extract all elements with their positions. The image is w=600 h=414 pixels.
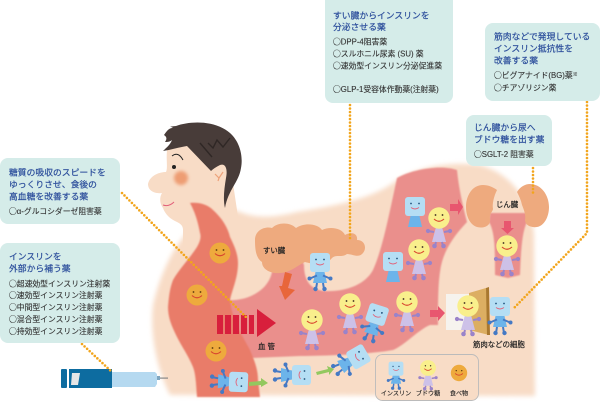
heading: absorption: 高血糖を改善する薬	[9, 190, 88, 202]
food 1	[210, 242, 230, 264]
heading: kidney drugs: ブドウ糖を出す薬	[474, 134, 545, 144]
legend glucose icon	[418, 360, 438, 390]
glucose 5	[394, 291, 420, 332]
food 3	[206, 340, 226, 362]
panel: absorption drugs	[0, 158, 120, 224]
insulin tilted	[356, 302, 392, 346]
drug list: pancreas drugs: ○速効型インスリン分泌促進薬	[333, 61, 442, 72]
drug list: absorption: ○α‑グルコシダーゼ阻害薬	[9, 206, 102, 217]
head and neck	[148, 135, 240, 250]
insulin near pancreas	[308, 253, 332, 291]
heading: resistance drugs: 改善する薬	[494, 54, 538, 66]
panel: pancreas drugs	[325, 0, 453, 103]
legend labels: インスリン	[381, 390, 411, 398]
heading: pancreas drugs: 分泌させる薬	[333, 21, 386, 32]
drug list: pancreas drugs	[333, 37, 442, 95]
drug list: pancreas drugs: ○DPP-4阻害薬	[333, 37, 387, 48]
drug list: kidney drugs: ○SGLT-2 阻害薬	[474, 149, 534, 160]
pancreas label: すい臓	[263, 246, 286, 255]
legend food icon	[451, 365, 467, 381]
legend insulin icon	[387, 362, 405, 390]
drug list: pancreas drugs: ○GLP-1受容体作動薬(注射薬)	[333, 84, 439, 95]
orange arrow from pancreas	[279, 272, 295, 300]
panel: insulin injection	[0, 243, 120, 343]
hair strands	[200, 138, 230, 157]
leader line: syringe	[82, 344, 112, 372]
cell door	[469, 287, 490, 335]
glucose arrow to kidney	[450, 199, 463, 215]
glucose 2	[406, 239, 432, 280]
insulin lying 2	[273, 362, 311, 388]
digestive tract	[168, 203, 260, 397]
glucose 4	[337, 293, 363, 334]
leader line: pancreas	[349, 105, 351, 240]
heading: absorption: 糖質の吸収のスピードを	[9, 166, 106, 178]
heading: insulin injection: 外部から補う薬	[9, 262, 71, 274]
drug list: insulin injection: ○超速効型インスリン注射薬	[9, 278, 110, 290]
insulin no limbs top	[405, 197, 425, 227]
glucose arrow into cell	[430, 306, 445, 321]
panel: kidney drugs	[466, 115, 552, 166]
insulin at cell	[488, 297, 512, 335]
body silhouette	[152, 164, 535, 396]
insulin lying 3	[327, 341, 373, 382]
drug list: insulin injection: ○速効型インスリン注射薬	[9, 290, 103, 301]
legend	[376, 354, 478, 400]
heading: resistance drugs: 筋肉などで発現している	[494, 30, 590, 42]
legend labels: 食べ物	[450, 390, 468, 398]
eyebrow	[172, 154, 183, 160]
kidney left	[466, 185, 497, 228]
vessel label: 血 管	[258, 342, 275, 351]
cell opening	[446, 294, 471, 330]
pancreas	[255, 224, 365, 273]
legend labels: ブドウ糖	[416, 390, 440, 398]
renal vessel	[489, 213, 527, 278]
drug list: pancreas drugs: ○スルホニル尿素 (SU) 薬	[333, 48, 424, 60]
heading: absorption	[9, 166, 106, 202]
kidney right	[517, 184, 549, 227]
drug list: resistance drugs	[494, 70, 578, 93]
glucose in renal vessel	[494, 235, 520, 276]
insulin lying 1	[209, 369, 248, 395]
leader line: kidney	[532, 168, 534, 194]
heading: pancreas drugs: すい臓からインスリンを	[333, 10, 430, 20]
glucose 1	[426, 207, 452, 248]
ear mark	[215, 172, 223, 181]
mouth	[163, 202, 174, 206]
cell label: 筋肉などの細胞	[473, 340, 525, 349]
drug list: insulin injection	[9, 278, 110, 337]
drug list: resistance drugs: ○ビグアナイド(BG)薬	[494, 70, 573, 81]
legend labels	[381, 390, 468, 398]
panel: resistance drugs	[485, 23, 600, 101]
green arrow 2	[316, 366, 334, 375]
heading: pancreas drugs	[333, 10, 430, 32]
heading: resistance drugs: インスリン抵抗性を	[494, 42, 573, 54]
heading: absorption: ゆっくりさせ、食後の	[9, 178, 97, 190]
heading: resistance drugs	[494, 30, 590, 66]
glucose entering cell	[455, 295, 481, 336]
heading: kidney drugs	[474, 122, 545, 144]
cheek	[174, 171, 188, 185]
big red arrow	[217, 309, 276, 337]
leader line: muscle cell	[513, 102, 587, 309]
syringe	[61, 369, 168, 388]
drug list: resistance drugs: ○チアゾリジン薬	[494, 82, 557, 93]
insulin no limbs middle	[383, 252, 403, 282]
eye	[172, 165, 176, 169]
glucose 6	[299, 309, 325, 350]
drug list: resistance drugs: ※	[573, 72, 578, 78]
green arrow 1	[249, 378, 268, 387]
food 2	[186, 284, 208, 306]
heading: kidney drugs: じん臓から尿へ	[474, 122, 536, 132]
hair	[163, 123, 242, 208]
arrow down to urine	[501, 221, 514, 234]
drug list: insulin injection: ○中間型インスリン注射薬	[9, 302, 103, 313]
heading: insulin injection: インスリンを	[9, 252, 62, 262]
heading: insulin injection	[9, 252, 71, 274]
drug list: insulin injection: ○混合型インスリン注射薬	[9, 314, 103, 325]
kidney label: じん臓	[496, 200, 519, 209]
drug list: insulin injection: ○持効型インスリン注射薬	[9, 326, 103, 337]
blood vessels	[225, 168, 467, 358]
leader line: sugar absorption	[122, 193, 247, 318]
